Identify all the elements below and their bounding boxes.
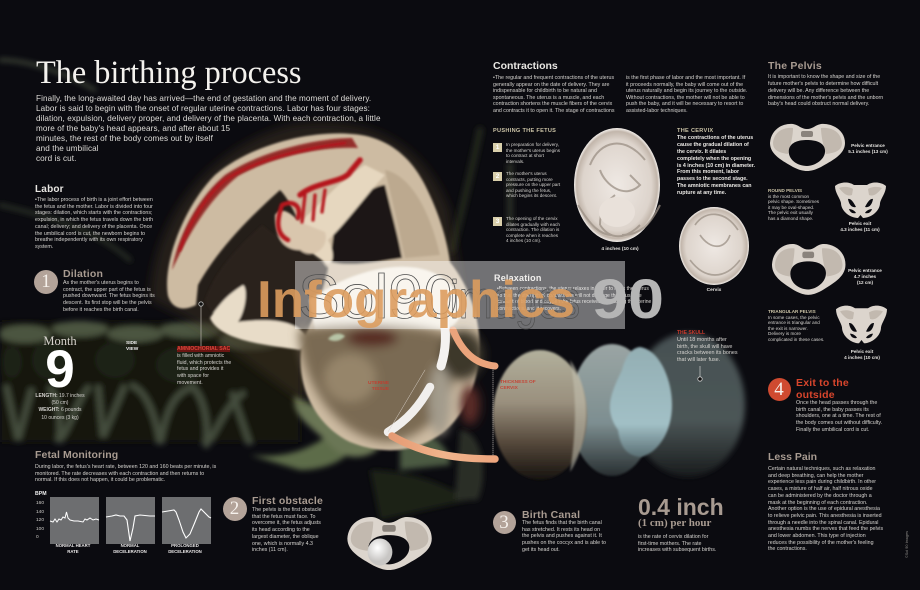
label: uterus: TISSUE	[372, 387, 389, 392]
caption: pelvic entrance triangular: Pelvic entrance	[848, 268, 882, 273]
dilation text: As the mother's uterus begins to	[63, 280, 139, 286]
caption: pelvic exit triangular: Pelvic exit	[851, 349, 873, 354]
labor text: breathe independently with its own respiratory	[35, 237, 143, 243]
stat text: first-time mothers. The rate	[638, 541, 701, 547]
birth canal text	[522, 520, 606, 553]
chart captions: NORMAL	[121, 543, 140, 548]
intro text: minutes, the rest of the body comes out by itself	[36, 134, 213, 143]
heading and text: the cervix: The amniotic membranes can	[677, 183, 751, 189]
panel: normal heart rate	[50, 497, 99, 544]
caption: pelvic exit triangular	[844, 349, 880, 360]
axis labels	[35, 491, 47, 540]
heading: contractions: Contractions	[493, 60, 558, 72]
axis labels: 120	[36, 517, 44, 523]
contractions text column 2: push the baby, and it will be necessary to resort to	[626, 101, 743, 107]
caption: pelvic entrance round: Pelvic entrance	[851, 143, 885, 148]
heading: relaxation: Relaxation	[494, 273, 542, 283]
caption: pelvic entrance round: 5.1 inches (13 cm)	[848, 149, 888, 154]
intro text: Finally, the long-awaited day has arrived—the end of gestation and the moment of delivery.	[36, 94, 371, 103]
label: uterus: UTERINE	[368, 381, 389, 386]
contractions text column 2: assisted-labor techniques.	[626, 108, 688, 114]
exit text: birth canal, the baby passes its	[796, 407, 869, 413]
round pelvis text: has a diamond shape.	[768, 216, 813, 221]
relaxation paragraph	[497, 286, 652, 312]
step text 1: In preparation for delivery,	[506, 142, 559, 147]
dilation text: pushed downward. The fetus begins its	[63, 293, 155, 299]
intro text: and the umbilical	[36, 144, 99, 153]
pelvis intro text: baby's head could obstruct normal delivery.	[768, 101, 869, 107]
chart captions: DECELERATION	[168, 549, 202, 554]
fetal monitoring text	[35, 464, 216, 483]
step text 2: which begins its descent.	[506, 193, 557, 198]
callout: the skull: cracks between its bones	[677, 350, 738, 356]
fetal monitoring text: During labor, the fetus's heart rate, between 120 and 160 beats per minute, is	[35, 464, 216, 470]
heading and text: the cervix: completely when the opening	[677, 156, 751, 162]
callout: amniochorial sac	[177, 346, 231, 386]
less pain text: reduces the possibility of the mother's feeling	[768, 540, 874, 546]
triangular pelvis text: In some cases, the pelvic	[768, 315, 820, 320]
heading: first obstacle: First obstacle	[252, 495, 323, 507]
step text 3: contraction. The dilation is	[506, 227, 559, 232]
round pelvis entrance	[770, 124, 845, 171]
heading: less pain: Less Pain	[768, 451, 817, 463]
triangular pelvis text: complicated in these cases.	[768, 337, 824, 342]
triangular pelvis text: the exit is narrower.	[768, 326, 808, 331]
first obstacle text: overcome it, the fetus adjusts	[252, 520, 321, 526]
birth canal text: pushes on the coccyx and is able to	[522, 540, 606, 546]
less pain text: to relieve pelvic pain. This anesthesia is inserted	[768, 513, 882, 519]
step text 2: pressure on the upper part	[506, 182, 560, 187]
chart: heart rate monitoring	[35, 491, 212, 554]
axis labels: 140	[36, 509, 44, 515]
caption: pelvic entrance triangular	[848, 268, 882, 285]
number badge 1: 1	[41, 271, 51, 292]
label: cervix: THICKNESS OF	[500, 380, 536, 385]
less pain text	[768, 466, 883, 553]
number badge 2: 2	[230, 498, 239, 518]
side view label: SIDE	[126, 341, 137, 346]
labor text: system.	[35, 244, 53, 250]
less pain text: Certain natural techniques, such as relaxation	[768, 466, 875, 472]
caption: 4 inches: 4 inches (10 cm)	[601, 247, 639, 252]
caption: pelvic exit triangular: 4 inches (10 cm)	[844, 355, 880, 360]
caption: pelvic entrance triangular: (12 cm)	[857, 280, 873, 285]
chart captions: DECELERATION	[113, 549, 147, 554]
length and weight: (50 cm)	[52, 400, 68, 406]
triangular pelvis text	[768, 309, 824, 342]
numeral 9: 9	[45, 340, 75, 399]
first obstacle text: largest diameter, the oblique	[252, 534, 319, 540]
round pelvis exit	[835, 182, 886, 218]
step text 2: contracts, putting more	[506, 177, 553, 182]
callout: the skull	[677, 330, 738, 363]
intro text: dilation, expulsion, delivery proper, and delivery of the placenta. With each contraction, a little	[36, 114, 381, 123]
step text 2: and pushing the fetus,	[506, 188, 551, 193]
step 3	[493, 216, 560, 243]
labor text	[35, 197, 153, 250]
axis labels: BPM	[35, 491, 47, 497]
number badge 3	[492, 510, 516, 534]
first obstacle text: that the fetus must face. To	[252, 514, 316, 520]
fetal monitoring text: monitored. The rate decreases with each contraction and then returns to	[35, 471, 204, 477]
heading and text: the cervix: From this moment, labor	[677, 169, 739, 175]
intro text: more of the baby's head appears, and after about 15	[36, 124, 230, 133]
triangular pelvis entrance	[772, 244, 845, 295]
step number 2	[493, 172, 502, 181]
birth canal text: the pelvis and pushes against it. It	[522, 533, 602, 539]
contractions text column 2: it proceeds normally, the baby will come out of the	[626, 82, 743, 88]
title: The birthing process	[36, 54, 302, 90]
birth canal text: has stretched. It rests its head on	[522, 527, 600, 533]
heading and text: the cervix: cause the gradual dilation of	[677, 142, 749, 148]
step text 3: The opening of the cervix	[506, 216, 558, 221]
contractions text column 1: indispensable for childbirth to be natural and	[493, 88, 597, 94]
triangular pelvis exit	[836, 306, 887, 343]
birth canal text: The fetus finds that the birth canal	[522, 520, 602, 526]
step number 3: 3	[496, 218, 499, 225]
length and weight: LENGTH: 19.7 inches	[35, 393, 85, 399]
triangular pelvis text: Delivery is more	[768, 331, 801, 336]
less pain text: mask at the beginning of each contraction.	[768, 500, 868, 506]
first obstacle text: one, which is normally 4.3	[252, 541, 313, 547]
heading: labor: Labor	[35, 184, 64, 195]
exit text: Once the head passes through the	[796, 400, 877, 406]
step text 1: the mother's uterus begins	[506, 148, 560, 153]
round pelvis text: it may be oval-shaped.	[768, 205, 814, 210]
watermark: Infographics	[257, 271, 575, 329]
stat: 0.4 inch per hour	[638, 494, 724, 553]
callout: amniochorial sac: is filled with amniotic	[177, 353, 224, 359]
chart captions: NORMAL HEART	[56, 543, 91, 548]
panel: normal deceleration	[106, 497, 155, 544]
step text 2: The mother's uterus	[506, 171, 547, 176]
contractions text column 2: Without contractions, the mother will not be able to	[626, 95, 745, 101]
first obstacle text	[252, 507, 322, 553]
callout: the skull: birth, the skull will have	[677, 344, 732, 350]
length and weight	[35, 393, 85, 421]
less pain text: anesthesia numbs the nerves that feed the pelvis	[768, 526, 883, 532]
triangular pelvis text: entrance is triangular and	[768, 320, 820, 325]
exit text: Finally the umbilical cord is cut.	[796, 427, 869, 433]
labor text: canal; delivery; and delivery of the placenta. Once	[35, 224, 152, 230]
step number 3	[493, 217, 502, 226]
stat value: 0.4 inch	[638, 494, 724, 520]
fetal monitoring text: normal. If this does not happen, it could be problematic.	[35, 477, 165, 483]
intro text	[36, 94, 381, 163]
chart captions: RATE	[67, 549, 79, 554]
number badge 1	[34, 270, 58, 294]
heading: the pelvis: The Pelvis	[768, 60, 822, 72]
stat text: increases with subsequent births.	[638, 547, 716, 553]
labor text: stages: dilation, which starts with the contractions;	[35, 210, 152, 216]
step 1	[493, 142, 560, 164]
watermark: 90	[592, 267, 664, 330]
step text 2	[506, 171, 560, 198]
illustration: fetus in uterus	[574, 128, 661, 242]
round pelvis text: is the most common	[768, 194, 809, 199]
number badge 2	[222, 496, 246, 520]
heading: exit to the outside: Exit to the	[796, 377, 849, 389]
round pelvis text	[768, 188, 819, 221]
contractions text column 1	[493, 75, 615, 114]
first obstacle text: The pelvis is the first obstacle	[252, 507, 321, 513]
less pain text: can be administered by the doctor through a	[768, 493, 872, 499]
month 9 block	[35, 334, 85, 421]
pelvis intro text: It is important to know the shape and size of the	[768, 74, 880, 80]
exit text	[796, 400, 882, 433]
dilation text	[63, 280, 155, 313]
step text 3: complete when it reaches	[506, 233, 558, 238]
heading and text: the cervix: passes to the second stage.	[677, 176, 748, 182]
intro text: cord is cut.	[36, 154, 76, 163]
stat text	[638, 534, 716, 553]
labor text: •The labor process of birth is a joint effort between	[35, 197, 153, 203]
heading and text: the cervix: the cervix. It dilates	[677, 149, 726, 155]
round pelvis text: The pelvic exit usually	[768, 210, 813, 215]
axis labels: 0	[36, 534, 39, 540]
callout: amniochorial sac: fluid, which protects the	[177, 360, 231, 366]
icon: pelvis with fetal head	[347, 517, 432, 570]
stat unit: (1 cm) per hour	[638, 517, 711, 529]
copyright: ©Sol 90 Images	[905, 531, 909, 558]
less pain text: cases, a mixture of half air, half nitrous oxide	[768, 486, 873, 492]
caption: pelvic exit round: 4.3 inches (11 cm)	[840, 227, 880, 232]
step text 3: 4 inches (10 cm).	[506, 238, 541, 243]
caption: pelvic exit round: Pelvic exit	[849, 221, 871, 226]
relaxation text	[494, 273, 652, 312]
label: cervix: CERVIX	[500, 386, 518, 391]
pelvis intro text: dimensions of the mother's pelvis and the unborn	[768, 95, 883, 101]
relaxation paragraph: •Between contractions, the uterus relaxes in order to relax the uterus	[497, 286, 649, 292]
length and weight: WEIGHT: 6 pounds	[38, 407, 82, 413]
less pain text: experience less pain during childbirth. In other	[768, 479, 876, 485]
first obstacle text: inches (11 cm).	[252, 547, 288, 553]
less pain text: Another option is the use of epidural anesthesia	[768, 506, 880, 512]
step number 2: 2	[496, 173, 499, 180]
relaxation paragraph: amount of blood and oxygen the fetus receives falls during the uterine	[497, 299, 651, 305]
round pelvis text: pelvic shape. Sometimes	[768, 199, 819, 204]
step text 1	[506, 142, 560, 164]
step text 1: intervals.	[506, 159, 524, 164]
exit text: the body comes out without difficulty.	[796, 420, 882, 426]
number badge 4: 4	[774, 379, 784, 400]
triangular pelvis text: TRIANGULAR PELVIS	[768, 309, 816, 314]
callout: amniochorial sac: AMNIOCHORIAL SAC	[177, 346, 230, 352]
side view label	[126, 341, 138, 352]
relaxation paragraph: so that the strength of contractions will not damage the fetus. The	[497, 293, 642, 299]
callout: the skull: THE SKULL	[677, 330, 705, 336]
intro text: Labor is said to begin with the onset of regular uterine contractions. Labor has four stages:	[36, 104, 370, 113]
axis labels: 100	[36, 526, 44, 532]
labor text: the fetus and the mother. Labor is divided into four	[35, 204, 153, 210]
relaxation paragraph: contractions, and it recovers.	[497, 306, 561, 312]
stat text: is the rate of cervix dilation for	[638, 534, 708, 540]
less pain text: through a needle into the spinal canal. Epidural	[768, 520, 878, 526]
dilation text: descent. Its first stop will be the pelvis	[63, 300, 152, 306]
labor text: the umbilical cord is cut, the newborn begins to	[35, 231, 145, 237]
callout: amniochorial sac: movement.	[177, 380, 203, 386]
contractions text column 1: spontaneous. The uterus is a muscle, and each	[493, 95, 604, 101]
number badge 4	[768, 378, 790, 401]
label: cervix	[500, 380, 536, 391]
exit text: shoulders, one at a time. The rest of	[796, 413, 881, 419]
step text 3: dilates gradually with each	[506, 222, 560, 227]
contractions text column 2: uterus naturally and begin its journey to the outside.	[626, 88, 747, 94]
chart captions: PROLONGED	[171, 543, 199, 548]
contractions text column 2: is the first phase of labor and the most important. If	[626, 75, 745, 81]
heading and text: the cervix: THE CERVIX	[677, 128, 713, 134]
illustration: cervix	[679, 207, 749, 285]
dilation text: contract, the upper part of the fetus is	[63, 287, 151, 293]
less pain text: and deep breathing, can help the mother	[768, 473, 863, 479]
pelvis intro text: delivery will be. Any difference between the	[768, 88, 869, 94]
step number 1	[493, 143, 502, 152]
heading: fetal monitoring: Fetal Monitoring	[35, 449, 118, 461]
callout: amniochorial sac: fetus and provides it	[177, 366, 223, 372]
heading: pushing the fetus: PUSHING THE FETUS	[493, 128, 556, 134]
round pelvis text: ROUND PELVIS	[768, 188, 802, 193]
heading and text: the cervix: The contractions of the uterus	[677, 135, 753, 141]
step number 1: 1	[496, 144, 499, 151]
contractions text column 1: •The regular and frequent contractions of the uterus	[493, 75, 614, 81]
birth canal text: get its head out.	[522, 547, 560, 553]
heading: exit to the outside	[796, 377, 849, 400]
caption: pelvic exit round	[840, 221, 880, 232]
heading: birth canal: Birth Canal	[522, 509, 580, 521]
heading and text: the cervix: rupture at any time.	[677, 190, 726, 196]
pelvis intro text: future mother's pelvis to determine how difficult	[768, 81, 878, 87]
first obstacle text: its head according to the	[252, 527, 310, 533]
step 2	[493, 171, 560, 198]
panel: prolonged deceleration	[162, 497, 211, 544]
label: uterus	[368, 381, 389, 392]
heading and text: the cervix	[677, 128, 755, 196]
dilation text: before it reaches the birth canal.	[63, 307, 139, 313]
labor text: expulsion, in which the fetus travels down the birth	[35, 217, 153, 223]
side view label: VIEW	[126, 347, 138, 352]
step text 1: to contract at short	[506, 153, 544, 158]
contractions text column 1: contraction shortens the muscle fibers of the cervix	[493, 101, 612, 107]
axis labels: 160	[36, 500, 44, 506]
contractions text column 1: and contracts it to open it. The stage of contractions	[493, 108, 615, 114]
pelvis illustrations	[770, 124, 887, 344]
contractions text column 2	[626, 75, 747, 114]
watermark: Sol90	[298, 263, 458, 332]
step text 3	[506, 216, 560, 243]
watermark: images	[450, 270, 580, 330]
heading: dilation: Dilation	[63, 268, 103, 280]
pelvis intro text	[768, 74, 883, 107]
number badge 3: 3	[499, 512, 509, 532]
less pain text: and lower abdomen. This type of injection	[768, 533, 866, 539]
callout: the skull: Until 18 months after	[677, 337, 727, 343]
length and weight: 10 ounces (3 kg)	[41, 415, 79, 421]
less pain text: the contractions.	[768, 546, 807, 552]
heading and text: the cervix: is 4 inches (10 cm) in diameter.	[677, 163, 755, 169]
callout: the skull: that will later fuse.	[677, 357, 720, 363]
caption: pelvic entrance triangular: 4.7 inches	[854, 274, 876, 279]
callout: amniochorial sac: with space for	[177, 373, 209, 379]
month label: Month	[43, 334, 77, 348]
caption: pelvic entrance round	[848, 143, 888, 154]
caption: cervix: Cervix	[707, 288, 721, 293]
contractions text column 1: generally appear on the date of delivery. They are	[493, 82, 609, 88]
heading: exit to the outside: outside	[796, 388, 835, 400]
chart captions	[56, 543, 202, 554]
